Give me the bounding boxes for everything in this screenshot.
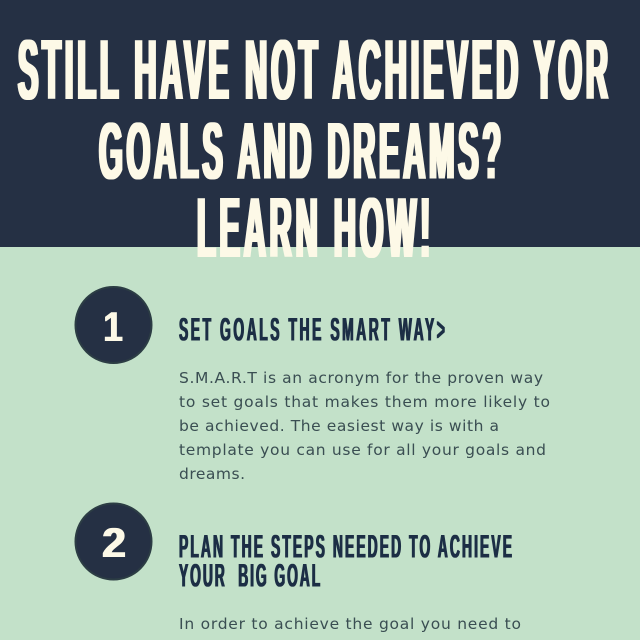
step 2: [76, 504, 521, 633]
step 2 heading: PLAN THE STEPS NEEDED TO ACHIEVE: [179, 530, 512, 565]
step 2 body text: In order to achieve the goal you need to: [179, 615, 521, 633]
step 1 body text: template you can use for all your goals and: [179, 441, 546, 459]
title: GOALS AND DREAMS?: [99, 106, 501, 196]
step 1 body text: dreams.: [179, 465, 245, 483]
step 1 heading: SET GOALS THE SMART WAY>: [179, 313, 445, 348]
icon: number 2 badge: 2: [102, 519, 126, 566]
step 1 body text: be achieved. The easiest way is with a: [179, 417, 499, 435]
step 2 heading: YOUR BIG GOAL: [179, 559, 320, 594]
step 2 heading: [179, 530, 512, 594]
icon: number 2 badge: [76, 504, 152, 580]
step 1 body text: [179, 369, 550, 483]
title: LEARN HOW!: [197, 180, 430, 276]
icon: number 1 badge: [76, 287, 152, 363]
title: [18, 22, 608, 276]
step 1: [76, 287, 550, 483]
step 1 body text: to set goals that makes them more likely to: [179, 393, 550, 411]
icon: number 1 badge: 1: [103, 304, 123, 351]
step 1 body text: S.M.A.R.T is an acronym for the proven way: [179, 369, 543, 387]
title: STILL HAVE NOT ACHIEVED YOR: [18, 22, 608, 118]
header banner: [0, 0, 640, 276]
